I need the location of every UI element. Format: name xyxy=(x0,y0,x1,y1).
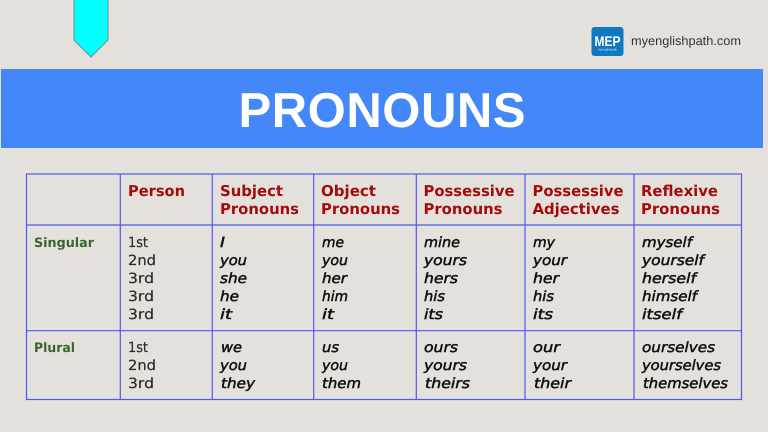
header row: Pronouns xyxy=(321,200,400,218)
icon: MEP logo badge: myenglishpath xyxy=(598,48,617,52)
title banner xyxy=(1,69,763,148)
header row: Possessive xyxy=(424,182,514,200)
singular subject pronouns: she xyxy=(220,271,247,287)
icon: MEP logo badge xyxy=(592,27,624,56)
plural subject pronouns: they xyxy=(221,376,256,392)
header row: Adjectives xyxy=(532,200,620,218)
pronouns table xyxy=(26,174,742,400)
singular persons: 3rd xyxy=(128,307,154,323)
singular persons: 3rd xyxy=(128,289,154,305)
singular possessive adjectives xyxy=(532,235,568,323)
plural possessive pronouns: yours xyxy=(423,358,467,374)
header row: Pronouns xyxy=(424,200,503,218)
singular possessive pronouns: yours xyxy=(423,253,467,269)
plural possessive pronouns: theirs xyxy=(425,376,470,392)
singular possessive pronouns: mine xyxy=(424,235,460,251)
singular persons: 3rd xyxy=(128,271,154,287)
singular persons: 2nd xyxy=(128,253,156,269)
singular possessive adjectives: my xyxy=(533,235,556,251)
singular object pronouns: it xyxy=(322,307,335,323)
singular possessive pronouns: his xyxy=(424,289,445,305)
singular reflexive pronouns: herself xyxy=(642,271,698,287)
icon: cyan bookmark arrow xyxy=(74,0,108,57)
logo text: myenglishpath.com xyxy=(631,34,741,48)
plural object pronouns: you xyxy=(321,358,348,374)
header row: Pronouns xyxy=(220,200,299,218)
plural reflexive pronouns xyxy=(641,340,728,392)
singular subject pronouns xyxy=(219,235,247,323)
singular object pronouns: you xyxy=(321,253,348,269)
singular reflexive pronouns: himself xyxy=(642,289,699,305)
plural possessive pronouns: ours xyxy=(424,340,458,356)
singular possessive adjectives: its xyxy=(533,307,553,323)
row label: Singular: Singular xyxy=(34,236,95,251)
plural possessive adjectives: their xyxy=(534,376,572,392)
heading: PRONOUNS xyxy=(238,84,526,138)
singular reflexive pronouns: myself xyxy=(642,235,694,251)
plural object pronouns: them xyxy=(322,376,361,392)
plural possessive pronouns xyxy=(423,340,470,392)
plural subject pronouns: we xyxy=(221,340,242,356)
singular object pronouns: him xyxy=(322,289,348,305)
singular possessive adjectives: her xyxy=(533,271,560,287)
singular object pronouns: me xyxy=(322,235,344,251)
plural object pronouns: us xyxy=(322,340,339,356)
singular subject pronouns: he xyxy=(220,289,239,305)
plural reflexive pronouns: themselves xyxy=(643,376,728,392)
plural reflexive pronouns: ourselves xyxy=(642,340,715,356)
singular subject pronouns: I xyxy=(220,235,225,251)
singular subject pronouns: it xyxy=(220,307,233,323)
plural persons: 2nd xyxy=(128,358,156,374)
logo xyxy=(592,27,741,56)
header row xyxy=(128,182,720,218)
plural persons xyxy=(128,340,156,392)
plural subject pronouns xyxy=(219,340,256,392)
singular persons xyxy=(128,235,156,323)
singular object pronouns: her xyxy=(322,271,348,287)
singular subject pronouns: you xyxy=(219,253,247,269)
singular reflexive pronouns: yourself xyxy=(641,253,706,269)
singular possessive pronouns: hers xyxy=(424,271,458,287)
header row: Reflexive xyxy=(641,182,718,200)
singular persons: 1st xyxy=(128,235,148,251)
singular possessive adjectives: your xyxy=(532,253,568,269)
singular possessive pronouns: its xyxy=(424,307,443,323)
singular reflexive pronouns xyxy=(641,235,706,323)
singular reflexive pronouns: itself xyxy=(642,307,684,323)
row label: Plural: Plural xyxy=(34,341,75,356)
header row: Person xyxy=(128,182,185,200)
plural possessive adjectives: our xyxy=(533,340,561,356)
header row: Possessive xyxy=(532,182,624,200)
icon: MEP logo badge: MEP xyxy=(594,33,620,49)
singular possessive adjectives: his xyxy=(533,289,554,305)
plural object pronouns xyxy=(321,340,361,392)
header row: Subject xyxy=(220,182,283,200)
header row: Object xyxy=(321,182,376,200)
plural persons: 1st xyxy=(128,340,148,356)
table grid xyxy=(26,174,742,400)
singular object pronouns xyxy=(321,235,348,323)
singular possessive pronouns xyxy=(423,235,467,323)
plural subject pronouns: you xyxy=(219,358,247,374)
plural reflexive pronouns: yourselves xyxy=(641,358,721,374)
plural possessive adjectives xyxy=(532,340,572,392)
header row: Pronouns xyxy=(641,200,720,218)
plural persons: 3rd xyxy=(128,376,154,392)
plural possessive adjectives: your xyxy=(532,358,568,374)
